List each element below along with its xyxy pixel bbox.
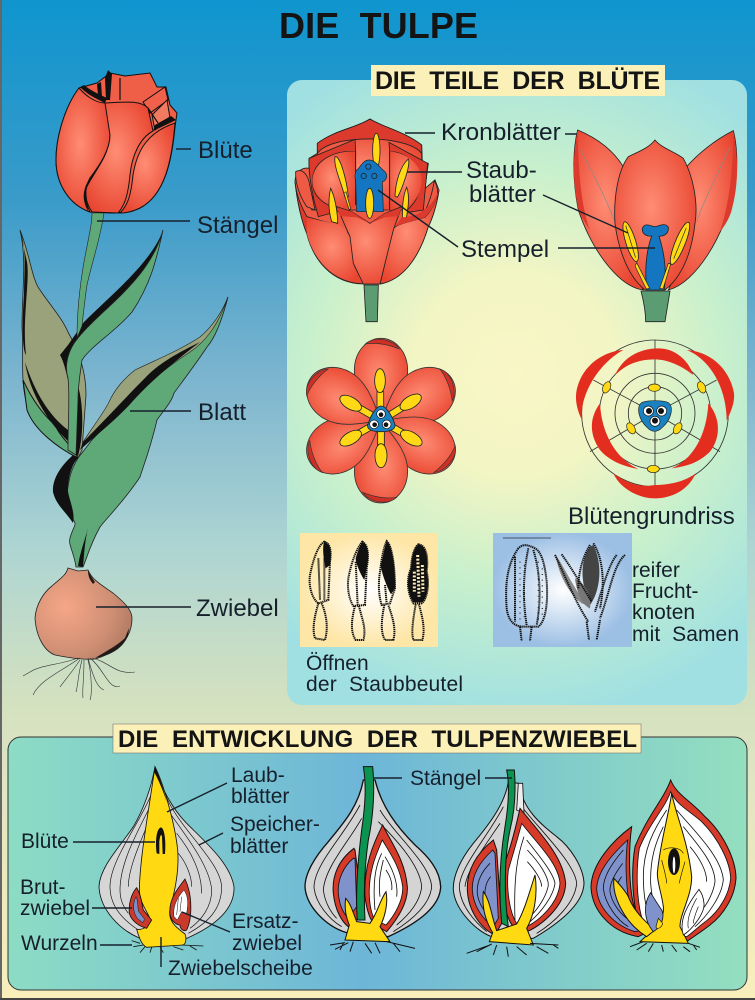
heading: Die Teile der Blüte: DIE TEILE DER BLÜTE	[375, 66, 660, 95]
caption: reifer Fruchtknoten mit Samen: knoten	[632, 601, 695, 624]
leader lines and labels: blossom parts: Stempel	[461, 236, 549, 263]
labels: bulb stage 1: Brut-	[20, 876, 66, 899]
leader lines and labels: blossom parts: Staub-	[466, 157, 537, 184]
tulip stem	[77, 213, 104, 338]
tulip bulb	[35, 568, 132, 659]
image: ripe fruit with seeds	[493, 533, 632, 647]
caption: reifer Fruchtknoten mit Samen	[632, 559, 739, 646]
label: Blütengrundriss: Blütengrundriss	[568, 503, 735, 530]
label: Blatt: Blatt	[198, 399, 246, 426]
labels: bulb stage 1: Laub-	[231, 764, 285, 787]
caption: reifer Fruchtknoten mit Samen: mit Samen	[632, 623, 739, 646]
illustration: whole tulip plant	[20, 70, 228, 700]
image: opening of the anthers	[300, 533, 438, 647]
label: Stängel	[373, 767, 512, 790]
diagram: top view of blossom	[296, 338, 466, 503]
panel: parts of the blossom	[287, 65, 747, 705]
labels: bulb stage 1: Wurzeln	[21, 932, 98, 955]
labels: bulb stage 1: blätter	[230, 835, 288, 858]
label: Stängel: Stängel	[197, 212, 278, 239]
label: Blüte: Blüte	[198, 137, 253, 164]
diagram: bulb stage 1	[99, 767, 234, 953]
labels: bulb stage 1: zwiebel	[232, 932, 302, 955]
diagram: blossom cross-section	[574, 130, 737, 322]
labels: bulb stage 1	[20, 764, 320, 980]
diagram: open blossom front	[295, 119, 439, 322]
leader lines and labels: blossom parts	[378, 119, 655, 263]
labels: bulb stage 1: Ersatz-	[232, 910, 299, 933]
tulip leaves	[20, 230, 228, 567]
caption: Öffnen der Staubbeutel: Öffnen	[306, 652, 369, 675]
labels: bulb stage 1: Blüte	[21, 830, 69, 853]
caption: reifer Fruchtknoten mit Samen: reifer	[632, 559, 680, 582]
bulb shading	[88, 570, 129, 658]
labels: bulb stage 1: Zwiebelscheibe	[168, 957, 313, 980]
labels: bulb stage 1: zwiebel	[20, 897, 90, 920]
label: Blatt	[130, 399, 246, 426]
label: Stängel: Stängel	[410, 767, 481, 790]
leader lines and labels: blossom parts: blätter	[469, 181, 536, 208]
title: DIE TULPE	[279, 5, 478, 46]
label: Zwiebel: Zwiebel	[196, 595, 279, 622]
caption: reifer Fruchtknoten mit Samen: Frucht-	[632, 580, 699, 603]
tulip blossom	[56, 70, 177, 213]
labels: bulb stage 1: blätter	[231, 785, 289, 808]
diagram: bulb stage 2	[305, 767, 441, 953]
diagram: bulb stage 4	[591, 780, 736, 952]
leader lines and labels: blossom parts: Kronblätter	[441, 119, 561, 146]
caption: Öffnen der Staubbeutel: der Staubbeutel	[306, 673, 463, 696]
labels: bulb stage 1: Speicher-	[230, 813, 320, 836]
roots	[23, 658, 135, 700]
caption: Öffnen der Staubbeutel	[306, 652, 463, 696]
heading: Die Entwicklung der Tulpenzwiebel: DIE ENTWICKLUNG DER TULPENZWIEBEL	[118, 726, 637, 753]
diagram: floral plan	[576, 340, 734, 498]
diagram: bulb stage 3	[453, 770, 584, 957]
panel: bulb development	[8, 724, 747, 990]
